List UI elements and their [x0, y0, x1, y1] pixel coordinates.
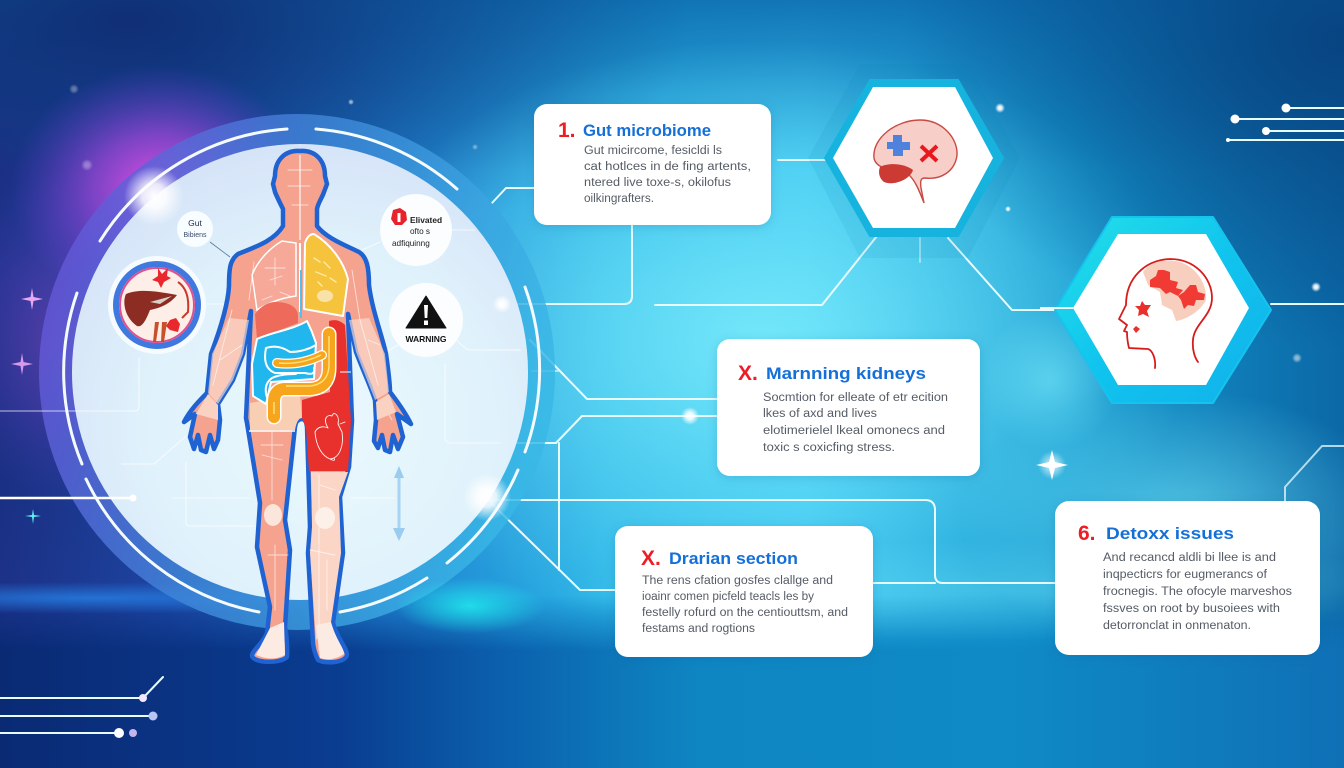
card 3: drarian section: festams and rogtions — [642, 623, 755, 635]
card 1: gut microbiome — [534, 104, 771, 225]
card 3: drarian section: ioainr comen picfeld teacls les by — [642, 591, 814, 603]
human body figure — [184, 151, 411, 662]
card 1: gut microbiome: 1. — [558, 119, 576, 142]
liver badge — [108, 256, 206, 354]
elevated label: adfiquinng — [392, 239, 430, 248]
left data line with node — [0, 494, 136, 502]
left lung — [252, 241, 296, 310]
hands — [196, 394, 396, 420]
card 4: detoxx issues: detorronclat in onmenaton. — [1103, 620, 1251, 632]
card 3: drarian section: The rens cfation gosfes clallge and — [642, 575, 833, 587]
card 2: marnning kidneys: lkes of axd and lives — [763, 408, 877, 420]
small label: gut — [177, 211, 230, 257]
hexagon: brain icon — [808, 64, 1020, 258]
card 2: marnning kidneys: toxic s coxicfing stress. — [763, 442, 895, 454]
card 4: detoxx issues: Detoxx issues — [1106, 524, 1234, 543]
card 4: detoxx issues: frocnegis. The ofocyle marveshos — [1103, 586, 1292, 598]
card 2: marnning kidneys: Marnning kidneys — [766, 364, 926, 383]
double arrow — [393, 466, 405, 541]
card 3: drarian section: Drarian section — [669, 549, 798, 568]
card 2: marnning kidneys — [717, 339, 980, 476]
card 4: detoxx issues: inqpecticrs for eugmerancs of — [1103, 569, 1268, 581]
card 1: gut microbiome: Gut micircome, fesicldi ls — [584, 145, 722, 157]
card 3: drarian section — [615, 526, 873, 657]
left hexagon connector — [1040, 307, 1073, 309]
heart sketch — [315, 414, 345, 460]
pale forearms — [208, 318, 389, 404]
card 4: detoxx issues: fssves on root by busoiees with — [1103, 603, 1280, 615]
centre spine — [299, 155, 301, 240]
icon: head with puzzle pieces — [1119, 259, 1212, 368]
card 3: drarian section: X. — [641, 547, 661, 570]
hexagon: head puzzle icon — [1040, 217, 1271, 403]
red organ — [302, 320, 351, 471]
card 4: detoxx issues: And recancd aldli bi llee is and — [1103, 552, 1276, 564]
warning badge: WARNING — [405, 334, 447, 344]
stomach and intestine blue — [252, 321, 316, 404]
small label: gut: Gut — [188, 218, 202, 228]
faint schematic lines inside disc — [0, 230, 521, 526]
icon: brain — [874, 120, 957, 203]
knees — [264, 504, 282, 526]
connector lines — [488, 160, 1344, 590]
card 4: detoxx issues: 6. — [1078, 522, 1096, 545]
card 1: gut microbiome: Gut microbiome — [583, 121, 711, 140]
yellow lung — [304, 234, 348, 316]
cyan glow under ring — [395, 578, 545, 634]
segmented glowing ring — [64, 129, 540, 612]
elevated label — [380, 194, 452, 266]
outer glass ring — [39, 114, 555, 630]
card 1: gut microbiome: cat hotlces in de fing artents, — [584, 161, 751, 173]
thigh divider — [249, 430, 295, 432]
card 2: marnning kidneys: Socmtion for elleate of etr ecition — [763, 392, 948, 404]
card 1: gut microbiome: ntered live toxe-s, okilofus — [584, 177, 731, 189]
decorative line nodes: top right — [1226, 104, 1344, 142]
body silhouette — [184, 151, 411, 662]
elevated label: Elivated — [410, 215, 442, 225]
pelvis — [250, 394, 302, 430]
card 2: marnning kidneys: X. — [738, 362, 758, 385]
liver organ — [255, 302, 298, 339]
card 3: drarian section: festelly rofurd on the centiouttsm, and — [642, 607, 848, 619]
warning badge — [389, 283, 463, 357]
intestine orange — [274, 334, 329, 417]
glow flares — [11, 84, 1321, 524]
card 2: marnning kidneys: elotimerielel lkeal omonecs and — [763, 425, 945, 437]
elevated label: ofto s — [410, 227, 430, 236]
limb veins — [196, 170, 392, 650]
feet — [256, 622, 344, 659]
decorative line nodes: bottom left — [0, 677, 163, 738]
card 1: gut microbiome: oilkingrafters. — [584, 193, 654, 205]
card 4: detoxx issues — [1055, 501, 1320, 655]
pale right thigh and lower leg — [310, 472, 348, 640]
small label: gut: Bibiens — [184, 232, 207, 239]
inner body disc — [72, 144, 528, 600]
